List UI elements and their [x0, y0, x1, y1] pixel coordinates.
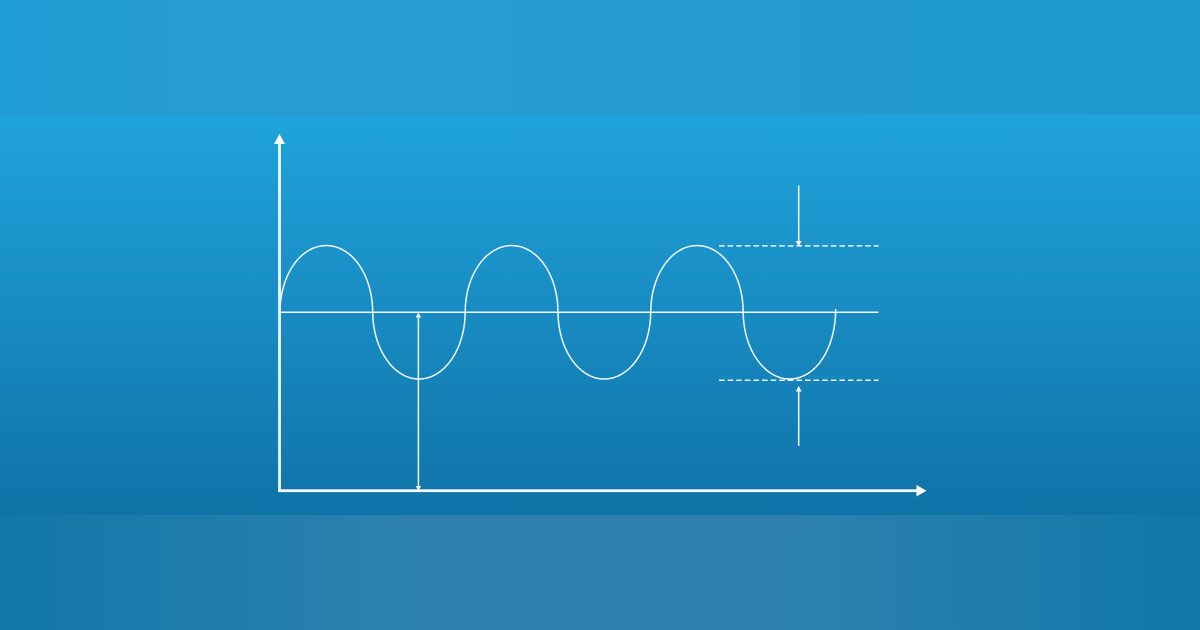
lower dashed amplitude line	[719, 379, 878, 381]
midline	[280, 311, 878, 313]
x axis with arrow	[278, 485, 927, 496]
bottom background band	[0, 515, 1200, 630]
downward arrow to upper amplitude	[796, 186, 802, 246]
main gradient panel	[0, 115, 1200, 515]
y axis with arrow	[274, 134, 285, 492]
upward arrow to lower amplitude	[796, 386, 802, 446]
sine wave curve	[280, 246, 836, 379]
double arrow from midline to x axis	[416, 313, 421, 490]
upper dashed amplitude line	[719, 245, 878, 247]
top background band	[0, 0, 1200, 115]
